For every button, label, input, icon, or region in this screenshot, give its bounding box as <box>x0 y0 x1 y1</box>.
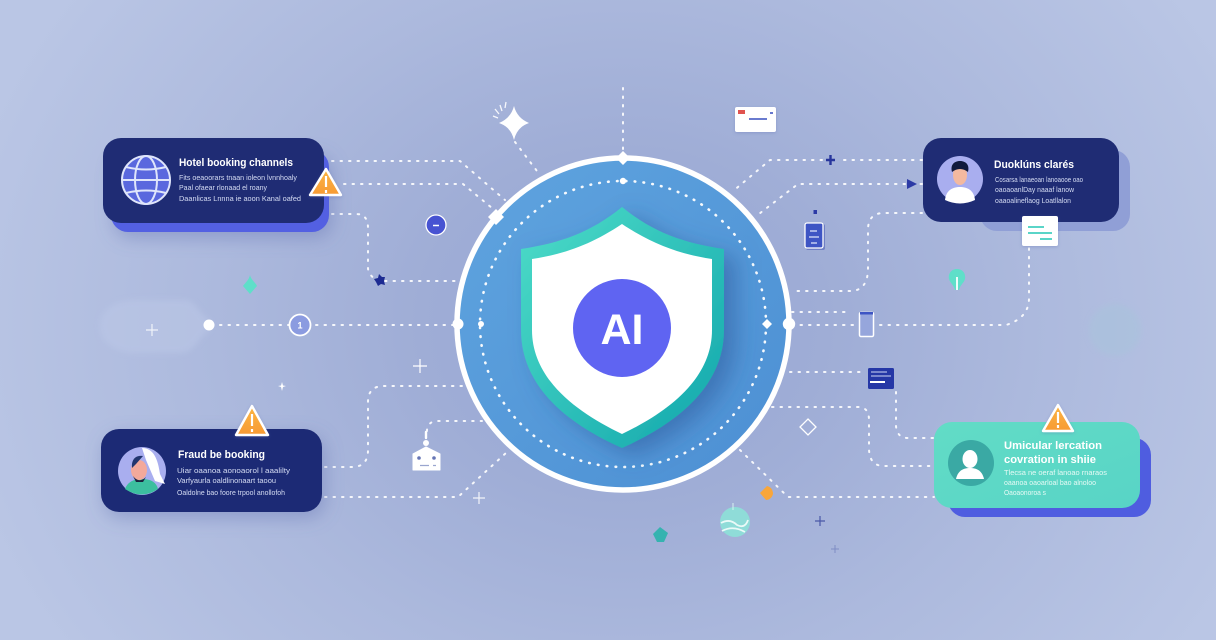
icon: warning <box>236 406 268 435</box>
body text <box>177 466 290 497</box>
icon: mobile device <box>805 210 825 250</box>
body text: Oaldolne bao foore trpool anollofoh <box>177 488 285 497</box>
icon: phone outline <box>860 312 874 336</box>
icon: blue document <box>868 368 894 389</box>
AI badge: AI <box>600 306 644 354</box>
body text <box>179 173 301 203</box>
icon: teal gem <box>243 275 257 294</box>
icon: avatar <box>937 156 983 204</box>
icon: avatar <box>948 440 994 486</box>
dotted inner ring <box>480 181 766 467</box>
body text <box>1004 468 1107 497</box>
dashed connectors left <box>220 88 623 497</box>
shield face <box>532 224 712 434</box>
shield <box>521 207 724 448</box>
icon: sparkle star <box>493 102 529 140</box>
heading: covration in shiie <box>1004 454 1096 466</box>
icon: dark star marker <box>374 274 385 286</box>
panel: fraud booking <box>101 406 322 512</box>
panel card <box>934 422 1140 508</box>
panel backing <box>111 150 329 232</box>
icon: warning <box>1043 405 1073 431</box>
shield rim <box>521 207 724 448</box>
body text: Tlecsa ne oeraf lanoao rnaraos <box>1004 468 1107 477</box>
body text: Paal ofaear rlonaad el roany <box>179 183 267 192</box>
faint background shapes <box>100 300 1141 356</box>
icon: teal globe <box>720 503 750 537</box>
panel backing <box>980 150 1130 231</box>
panel card <box>103 138 324 223</box>
icon: orange marker <box>760 486 773 500</box>
icon: teal pin <box>949 269 965 290</box>
icon: left start dot <box>204 320 214 330</box>
body text: Varfyaurla oaldlinonaart taoou <box>177 476 276 485</box>
central disc <box>452 151 795 490</box>
icon: triangle marker <box>907 179 917 189</box>
heading: Hotel booking channels <box>179 157 293 169</box>
heading: Umicular lercation <box>1004 440 1102 452</box>
icon: robot <box>413 432 440 470</box>
icon: small sparkles and plus signs <box>146 155 839 553</box>
panel card <box>101 429 322 512</box>
icon: numbered node: 1 <box>297 320 303 330</box>
heading: Fraud be booking <box>178 449 265 461</box>
heading: Duoklúns clarés <box>994 159 1074 171</box>
AI badge <box>573 279 671 377</box>
panel card <box>923 138 1119 222</box>
icon: outline diamond <box>800 419 816 435</box>
body text: oaanoa oaoarloal bao alnoloo <box>1004 478 1096 487</box>
icon: globe <box>122 156 170 204</box>
ring nodes <box>452 151 795 330</box>
body text <box>995 175 1083 205</box>
icon: blue circle badge <box>426 215 446 235</box>
dashed connectors right <box>732 160 1029 497</box>
disc body <box>457 158 789 490</box>
heading <box>1004 440 1102 466</box>
icon: note card <box>1022 216 1058 246</box>
panel: unusual location <box>934 405 1151 517</box>
body text: Uiar oaanoa aonoaorol l aaalilty <box>177 466 290 475</box>
icon: avatar <box>118 447 166 495</box>
icon: numbered node <box>290 314 310 336</box>
body text: oaaoalineflaog Loatllalon <box>995 196 1071 205</box>
body text: Fits oeaoorars tnaan ioleon lvnnhoaly <box>179 173 297 182</box>
icon: message card <box>735 107 776 132</box>
panel: hotel booking channels <box>103 138 341 232</box>
icon: teal small gem <box>653 527 668 542</box>
body text: Daanlicas Lnnna ie aoon Kanal oafed <box>179 194 301 203</box>
body text: oaoaoanlDay naaaf lanow <box>995 185 1075 194</box>
panel backing <box>948 438 1151 517</box>
body text: Cosarsa lanaeoan lanoaooe oao <box>995 175 1083 184</box>
body text: Oaoaonoroa s <box>1004 488 1046 497</box>
icon: warning <box>310 169 341 195</box>
panel: duplicate claims <box>923 138 1130 246</box>
